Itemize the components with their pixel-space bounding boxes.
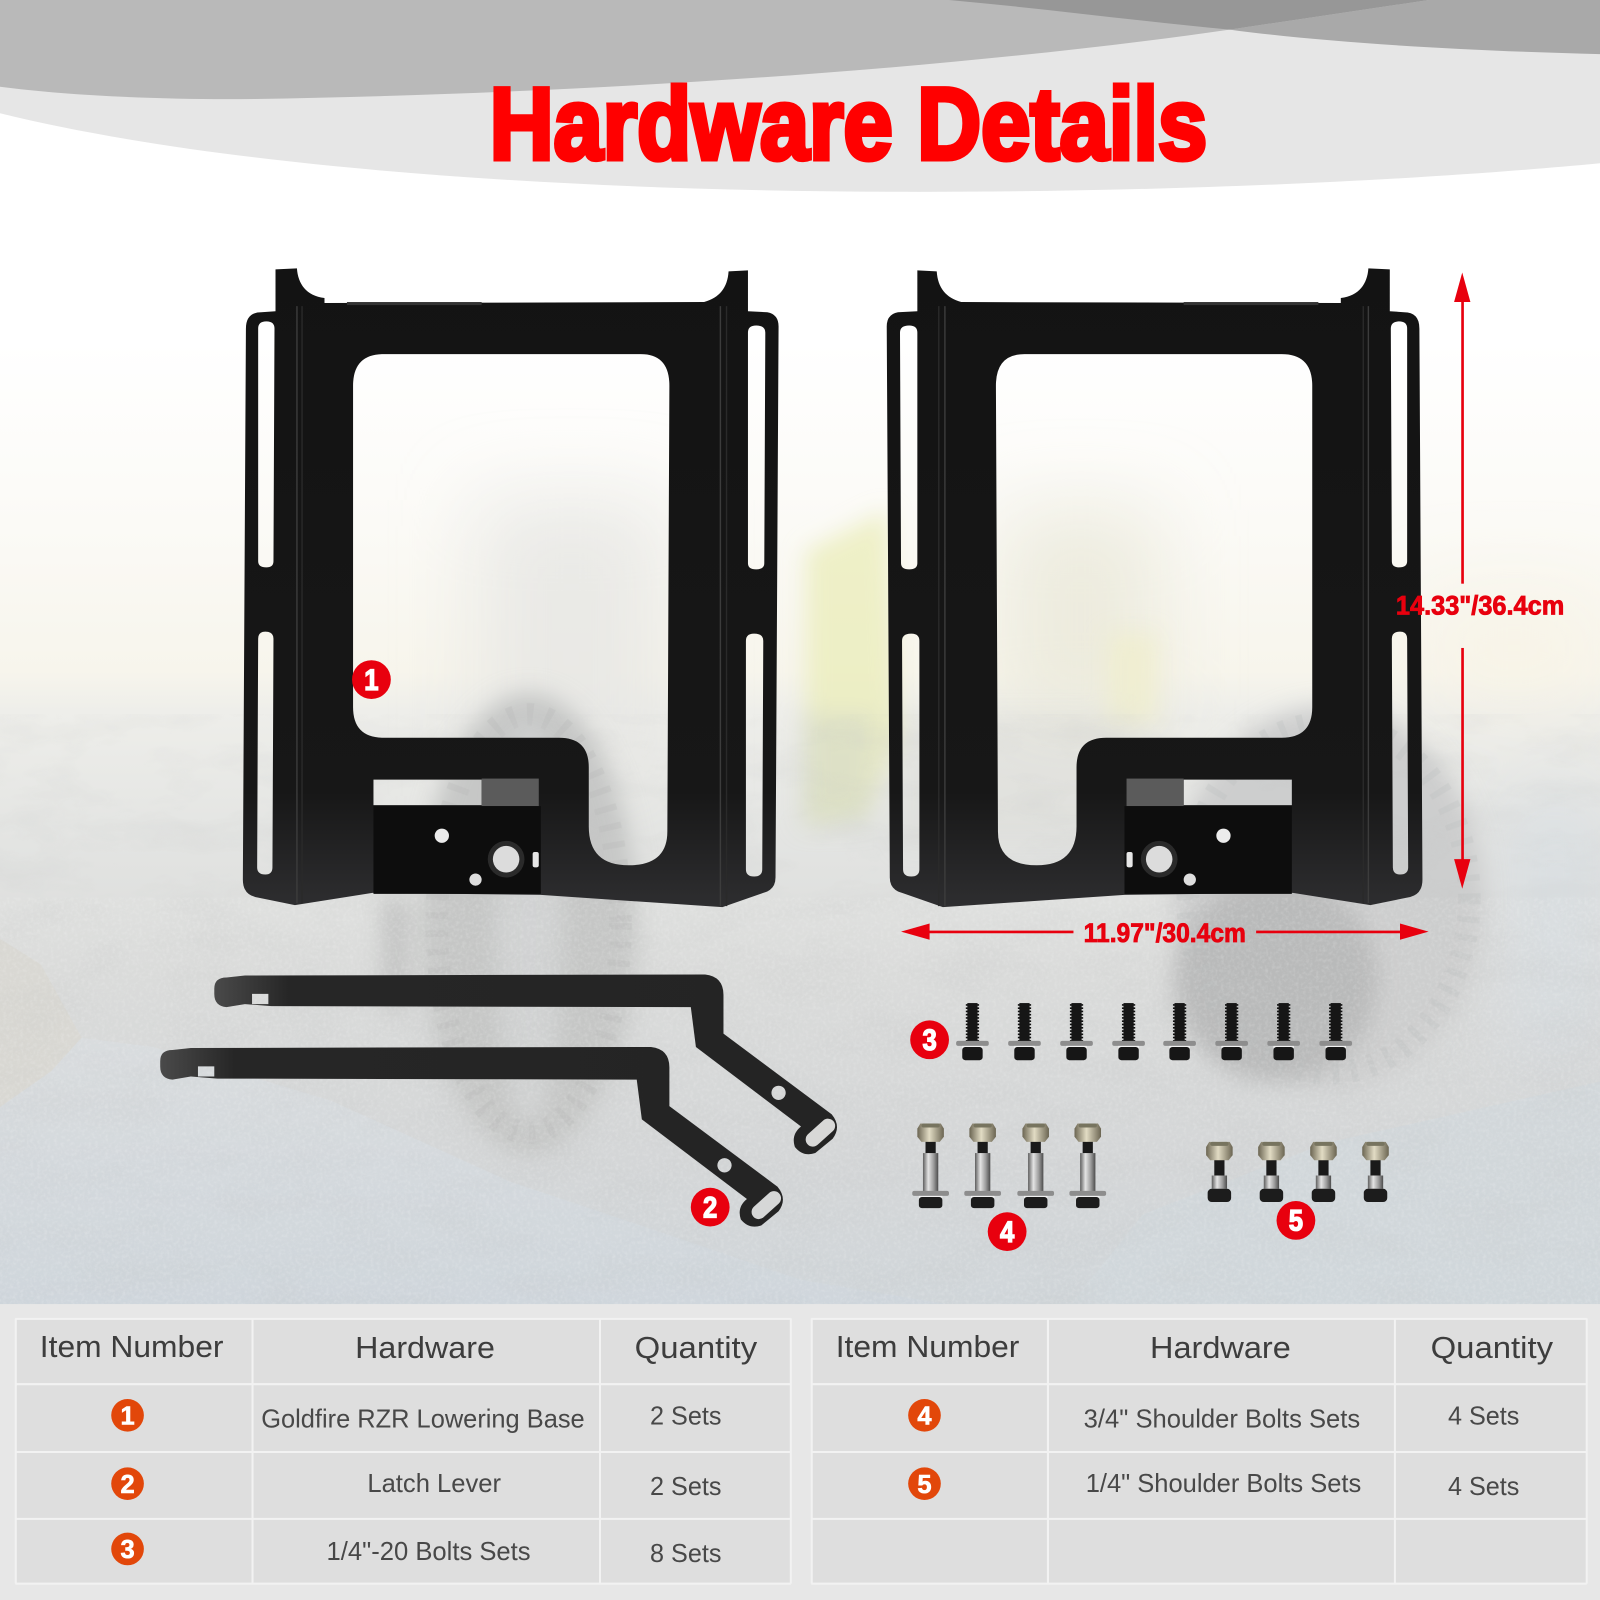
row 1: 1 bbox=[120, 1402, 135, 1430]
row 3: 3 bbox=[120, 1536, 135, 1564]
badge 3 bbox=[910, 1020, 949, 1059]
table: left items 1-3: Quantity bbox=[635, 1331, 758, 1365]
row 5: 5 bbox=[917, 1471, 932, 1499]
row 4 bbox=[908, 1399, 1519, 1434]
left boulder bbox=[0, 939, 82, 1107]
row 5: 4 Sets bbox=[1448, 1473, 1519, 1501]
row 5: 1/4" Shoulder Bolts Sets bbox=[1086, 1470, 1361, 1498]
badge 2: 2 bbox=[703, 1191, 717, 1224]
bolts: eight 1/4"-20 bolts bbox=[956, 1003, 1352, 1060]
row 2: 2 bbox=[120, 1471, 135, 1499]
fold highlights bbox=[297, 306, 720, 906]
row 1 bbox=[111, 1399, 721, 1434]
row 3: 1/4"-20 Bolts Sets bbox=[327, 1538, 531, 1566]
title: Hardware Details bbox=[490, 67, 1207, 181]
row 2 bbox=[111, 1467, 721, 1501]
table: left items 1-3 bbox=[15, 1318, 791, 1584]
badge 2 bbox=[691, 1188, 730, 1227]
row 4: 4 Sets bbox=[1448, 1402, 1519, 1430]
row 2: Latch Lever bbox=[367, 1470, 502, 1498]
row 4: 3/4" Shoulder Bolts Sets bbox=[1084, 1406, 1360, 1434]
latch lever lower bbox=[160, 1047, 784, 1227]
height label: 14.33"/36.4cm bbox=[1396, 590, 1564, 620]
table: right items 4-5 bbox=[811, 1318, 1587, 1584]
tyre tread bbox=[437, 714, 620, 1133]
badge 5: 5 bbox=[1289, 1205, 1303, 1238]
bracket: right lowering base bbox=[887, 268, 1422, 907]
row 4: 4 bbox=[917, 1402, 932, 1430]
bolts: four 3/4" shoulder bolts bbox=[912, 1123, 1106, 1208]
table: left items 1-3: Item Number bbox=[40, 1330, 223, 1364]
bolts: four 1/4" shoulder bolts bbox=[1206, 1142, 1389, 1202]
row 1: 2 Sets bbox=[650, 1402, 721, 1430]
badge 1 bbox=[352, 660, 391, 699]
badge 4 bbox=[988, 1212, 1027, 1251]
table: right items 4-5: Hardware bbox=[1150, 1331, 1291, 1365]
table: right items 4-5: Item Number bbox=[836, 1330, 1019, 1364]
table: left items 1-3: Hardware bbox=[355, 1331, 495, 1365]
bracket: left lowering base bbox=[243, 268, 779, 907]
latch lever upper bbox=[214, 974, 838, 1154]
badge 3: 3 bbox=[922, 1024, 937, 1057]
row 1: Goldfire RZR Lowering Base bbox=[261, 1406, 585, 1434]
table: right items 4-5: Quantity bbox=[1431, 1331, 1554, 1365]
foreground rock bbox=[0, 1038, 1020, 1316]
badge 4: 4 bbox=[1000, 1216, 1015, 1249]
row 3: 8 Sets bbox=[650, 1540, 721, 1568]
badge 5 bbox=[1277, 1201, 1315, 1240]
table panel background bbox=[0, 1304, 1600, 1600]
row 5 bbox=[908, 1467, 1519, 1501]
badge 1: 1 bbox=[364, 664, 379, 697]
tyres bbox=[420, 693, 637, 1154]
row 3 bbox=[111, 1533, 721, 1568]
arrow: height dimension bbox=[1454, 272, 1470, 889]
arrow: width dimension bbox=[901, 923, 1429, 940]
row 2: 2 Sets bbox=[650, 1473, 721, 1501]
header wave background bbox=[0, 0, 1600, 192]
width label: 11.97"/30.4cm bbox=[1084, 918, 1246, 948]
